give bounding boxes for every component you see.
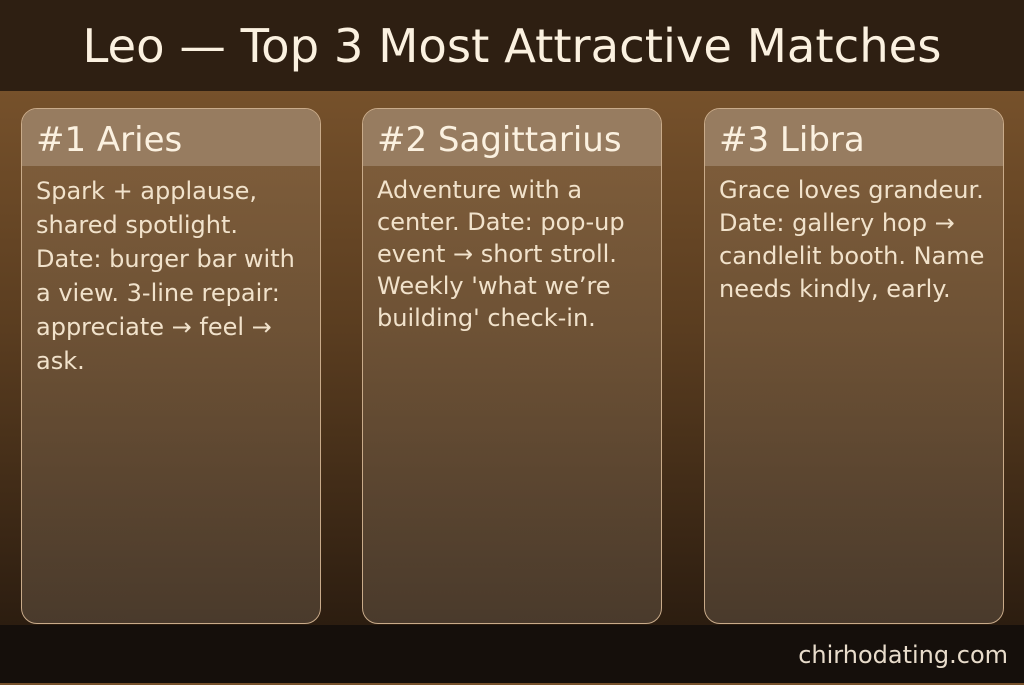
text: Sagittarius description: center. Date: pop-up [377, 208, 625, 236]
text: Aries description: shared spotlight. [36, 211, 238, 239]
heading: #2 Sagittarius [363, 109, 661, 166]
text: Sagittarius description: building' check-in. [377, 304, 596, 332]
text: Aries description: Spark + applause, [36, 177, 257, 205]
heading: #1 Aries [22, 109, 320, 166]
text: Libra description: needs kindly, early. [719, 275, 951, 303]
heading: #2 Sagittarius: #2 Sagittarius [377, 120, 622, 160]
text: Aries description [36, 177, 295, 375]
heading: #1 Aries: #1 Aries [36, 120, 182, 160]
footer: site name: chirhodating.com [798, 641, 1008, 669]
panel: #2 Sagittarius [362, 108, 662, 624]
text: Libra description: Grace loves grandeur. [719, 176, 984, 204]
text: Sagittarius description: event → short stroll. [377, 240, 617, 268]
text: Aries description: appreciate → feel → [36, 313, 272, 341]
title [0, 0, 1024, 91]
text: Sagittarius description: Weekly 'what we’re [377, 272, 611, 300]
text: Libra description: Date: gallery hop → [719, 209, 955, 237]
text: Aries description: Date: burger bar with [36, 245, 295, 273]
text: Sagittarius description [377, 176, 625, 332]
panel: #3 Libra [704, 108, 1004, 624]
heading: #3 Libra [705, 109, 1003, 166]
text: Aries description: ask. [36, 347, 85, 375]
text: Libra description: candlelit booth. Name [719, 242, 984, 270]
text: Sagittarius description: Adventure with a [377, 176, 582, 204]
footer: site name [0, 625, 1024, 683]
heading: #3 Libra: #3 Libra [719, 120, 865, 160]
text: Aries description: a view. 3-line repair: [36, 279, 280, 307]
text: Libra description [719, 176, 984, 303]
title: Leo — Top 3 Most Attractive Matches [82, 19, 942, 73]
panel: #1 Aries [21, 108, 321, 624]
